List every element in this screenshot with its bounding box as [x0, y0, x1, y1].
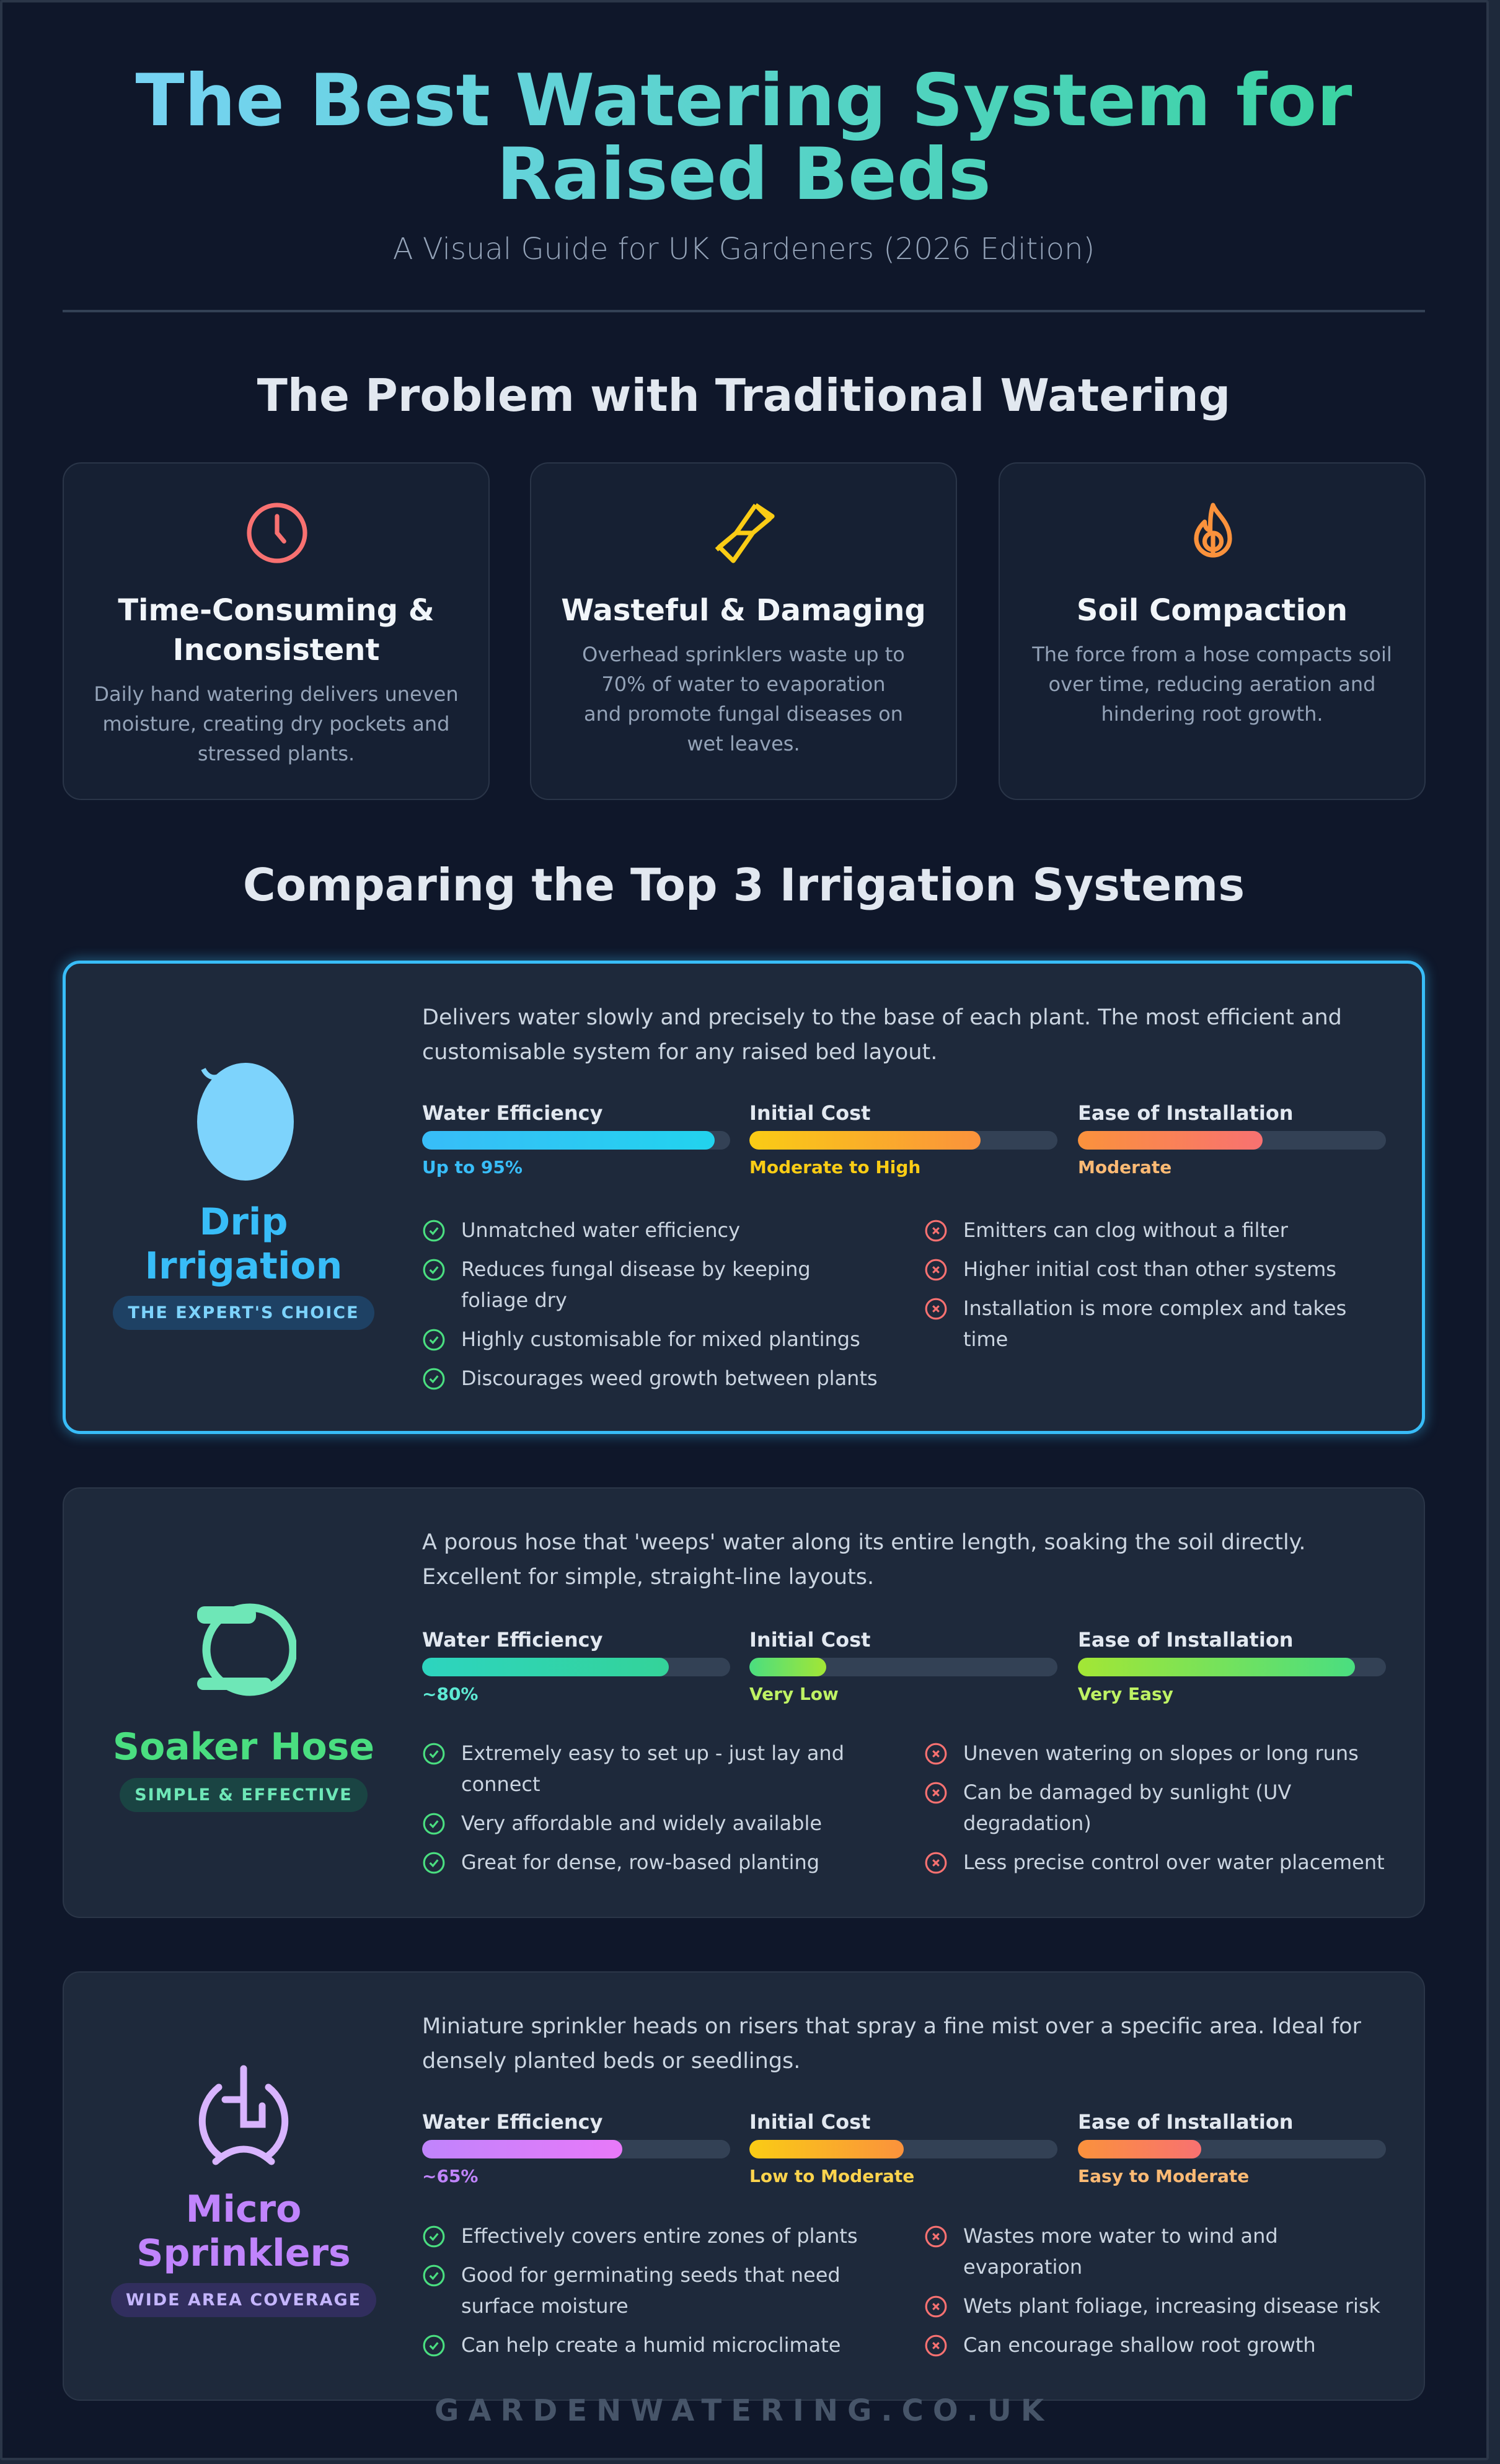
metric: cost: Initial Cost	[749, 2110, 870, 2134]
badge	[111, 2283, 376, 2317]
cons list: Higher initial cost than other systems	[963, 1257, 1336, 1281]
name: Soaker Hose	[113, 1725, 374, 1769]
metric: cost: Low to Moderate	[749, 2166, 914, 2186]
name: Drip	[200, 1200, 288, 1244]
cons list: Wets plant foliage, increasing disease risk	[963, 2294, 1380, 2318]
heading: problem: The Problem with Traditional Watering	[257, 369, 1230, 421]
metric: ease	[1078, 1628, 1386, 1704]
metric: cost: Initial Cost	[749, 1628, 870, 1652]
metric: ease: Easy to Moderate	[1078, 2166, 1249, 2186]
cons list: Can be damaged by sunlight (UV degradation)	[963, 1780, 1291, 1835]
metric: ease: Moderate	[1078, 1157, 1171, 1177]
metric: cost: Moderate to High	[749, 1157, 920, 1177]
pros list: Effectively covers entire zones of plants	[461, 2224, 858, 2248]
badge	[113, 1296, 374, 1330]
cons list: Less precise control over water placement	[963, 1850, 1385, 1874]
cons list	[925, 1741, 1385, 1874]
soaker left column	[113, 1604, 374, 1812]
metric: ease: Ease of Installation	[1078, 2110, 1294, 2134]
panel title: Wasteful & Damaging	[561, 593, 926, 628]
title: Raised Beds	[496, 133, 991, 216]
description: Delivers water slowly and precisely to the base of each plant. The most efficient and customisable system for any raised bed layout.	[422, 1005, 1342, 1065]
pros list	[423, 2224, 858, 2357]
metric: ease	[1078, 2110, 1386, 2186]
metric: water: Water Efficiency	[422, 2110, 602, 2134]
cons list: Emitters can clog without a filter	[963, 1218, 1288, 1242]
metric: ease: Very Easy	[1078, 1684, 1173, 1704]
panel: soaker hose	[63, 1487, 1425, 1918]
name	[136, 2188, 351, 2275]
panel: drip irrigation	[63, 961, 1425, 1434]
metric: water efficiency: Water Efficiency	[422, 1101, 602, 1125]
pros list	[423, 1741, 844, 1874]
metric: water efficiency	[422, 1101, 730, 1177]
cons list	[925, 2224, 1380, 2357]
name: Sprinklers	[136, 2232, 351, 2275]
pros list	[423, 1218, 878, 1390]
title	[0, 64, 1488, 211]
name: Irrigation	[145, 1244, 342, 1288]
micro left column	[111, 2065, 376, 2317]
panel title	[118, 593, 435, 667]
panel text: Overhead sprinklers waste up to 70% of water to evaporation and promote fungal diseases on wet leaves.	[582, 643, 905, 755]
icon: lightning	[715, 503, 775, 563]
panel title: Inconsistent	[173, 633, 379, 667]
metric: ease: Ease of Installation	[1078, 1628, 1294, 1652]
title: The Best Watering System for	[136, 59, 1352, 143]
badge: WIDE AREA COVERAGE	[126, 2290, 361, 2310]
metric: ease	[1078, 1101, 1386, 1177]
badge: SIMPLE & EFFECTIVE	[135, 1785, 353, 1805]
badge	[120, 1778, 368, 1812]
panel: wasteful	[530, 462, 957, 800]
cons list: Installation is more complex and takes time	[963, 1296, 1346, 1351]
panel: micro sprinklers	[63, 1971, 1425, 2401]
metric: water: ~65%	[422, 2166, 478, 2186]
pros list: Extremely easy to set up - just lay and connect	[461, 1741, 844, 1796]
icon: clock	[247, 503, 307, 563]
metric: cost: Very Low	[749, 1684, 839, 1704]
pros list: Discourages weed growth between plants	[461, 1366, 878, 1390]
metric: water: Water Efficiency	[422, 1628, 602, 1652]
panel title: Soil Compaction	[1077, 593, 1348, 628]
pros list: Highly customisable for mixed plantings	[461, 1327, 860, 1351]
name: Micro	[186, 2188, 301, 2231]
panel: soil compaction	[999, 462, 1426, 800]
panel: time-consuming	[63, 462, 490, 800]
cons list: Uneven watering on slopes or long runs	[963, 1741, 1359, 1765]
pros list: Good for germinating seeds that need surface moisture	[461, 2263, 840, 2318]
icon: hose	[197, 1604, 296, 1696]
pros list: Great for dense, row-based planting	[461, 1850, 819, 1874]
metric: ease: Ease of Installation	[1078, 1101, 1294, 1125]
description: Miniature sprinkler heads on risers that spray a fine mist over a specific area. Ideal for densely planted beds or seedlings.	[422, 2014, 1361, 2074]
badge: THE EXPERT'S CHOICE	[128, 1303, 360, 1322]
pros list: Reduces fungal disease by keeping foliage dry	[461, 1257, 811, 1312]
icon: sprinkler	[198, 2065, 289, 2165]
pros list: Unmatched water efficiency	[461, 1218, 740, 1242]
drip left column	[113, 1063, 374, 1330]
cons list	[925, 1218, 1346, 1351]
metric: cost	[749, 2110, 1057, 2186]
cons list: Can encourage shallow root growth	[963, 2333, 1316, 2357]
panel title: Time-Consuming &	[118, 593, 435, 628]
metric: water	[422, 1628, 730, 1704]
panel text: Daily hand watering delivers uneven moisture, creating dry pockets and stressed plants.	[94, 682, 459, 765]
cons list: Wastes more water to wind and evaporation	[963, 2224, 1278, 2279]
name	[145, 1200, 342, 1288]
metric: cost: Initial Cost	[749, 1101, 870, 1125]
description: A porous hose that 'weeps' water along its entire length, soaking the soil directly. Excellent for simple, straight-line layouts.	[422, 1530, 1306, 1590]
icon: flame	[1194, 503, 1232, 558]
metric: water: ~80%	[422, 1684, 478, 1704]
metric: water	[422, 2110, 730, 2186]
subtitle: A Visual Guide for UK Gardeners (2026 Edition)	[393, 232, 1095, 266]
heading: comparing: Comparing the Top 3 Irrigation Systems	[243, 859, 1245, 911]
pros list: Can help create a humid microclimate	[461, 2333, 840, 2357]
metric: cost	[749, 1628, 1057, 1704]
panel text: The force from a hose compacts soil over time, reducing aeration and hindering root growth.	[1032, 643, 1392, 726]
footer: GARDENWATERING.CO.UK	[435, 2393, 1053, 2428]
metric: cost	[749, 1101, 1057, 1177]
icon: drip	[197, 1063, 294, 1181]
pros list: Very affordable and widely available	[461, 1811, 822, 1835]
metric: water efficiency: Up to 95%	[422, 1157, 523, 1177]
